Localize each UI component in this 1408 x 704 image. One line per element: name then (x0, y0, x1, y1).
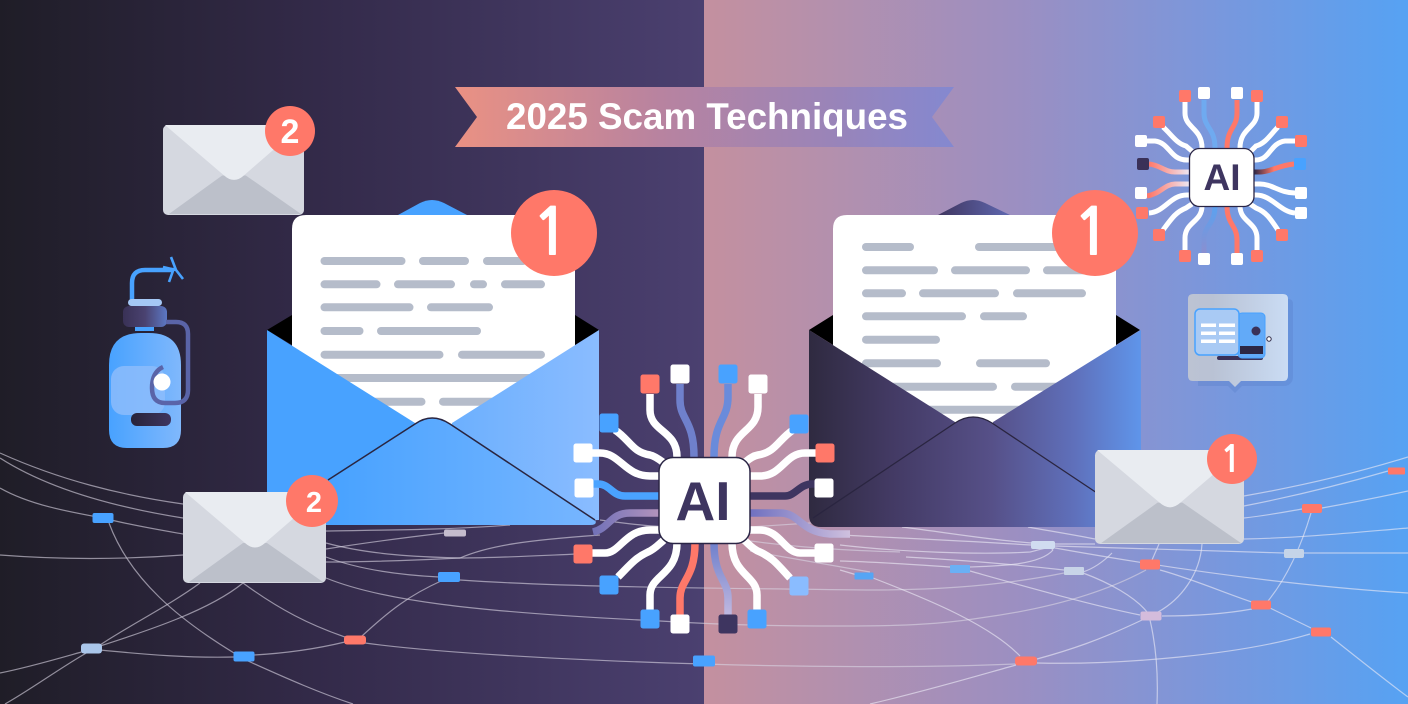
background: light right half (704, 0, 1408, 704)
envelope right wing (973, 330, 1141, 527)
big right badge 1: 1 (1072, 200, 1112, 265)
chip terminals (574, 364, 834, 634)
network: left side connections (0, 453, 1146, 704)
small AI chip top right (1135, 87, 1307, 265)
envelope left wing (267, 330, 432, 525)
envelope left wing (809, 330, 973, 527)
chip wires (583, 384, 850, 615)
big right badge 1 (1052, 190, 1138, 276)
badge 2: 2 (281, 113, 299, 151)
lower right envelope with badge 1 (1095, 434, 1257, 544)
badge 2 (265, 106, 315, 156)
network nodes (81, 468, 1405, 666)
big left badge 1: 1 (531, 200, 571, 265)
lower left envelope with badge (183, 475, 338, 583)
chip label: AI (1204, 157, 1240, 198)
central AI chip (574, 364, 850, 634)
envelope front flap (813, 417, 1100, 527)
title ribbon (455, 87, 954, 147)
chip wires (1147, 100, 1295, 253)
big left badge 1 (511, 190, 597, 276)
small envelope with badge 2 (163, 106, 315, 215)
letter sheet (833, 215, 1116, 440)
network: right side connections (840, 457, 1408, 704)
icon: wallet and document card (1188, 294, 1293, 393)
chip body (659, 458, 750, 544)
chip terminals (1135, 87, 1307, 265)
badge 1 (1207, 434, 1257, 484)
badge garbled 2: 2 (306, 487, 322, 519)
badge 1: 1 (1220, 441, 1242, 478)
envelope front flap (262, 418, 596, 525)
chip label: AI (676, 470, 730, 532)
envelope right wing (432, 330, 599, 525)
big blue open envelope (262, 200, 599, 525)
icon: blue spray bottle (109, 257, 188, 448)
big dark open envelope (809, 200, 1141, 527)
title text: 2025 Scam Techniques (506, 96, 908, 137)
background: dark left half (0, 0, 704, 704)
letter sheet (292, 215, 575, 440)
badge garbled 2 (286, 475, 338, 527)
chip body (1190, 148, 1254, 206)
